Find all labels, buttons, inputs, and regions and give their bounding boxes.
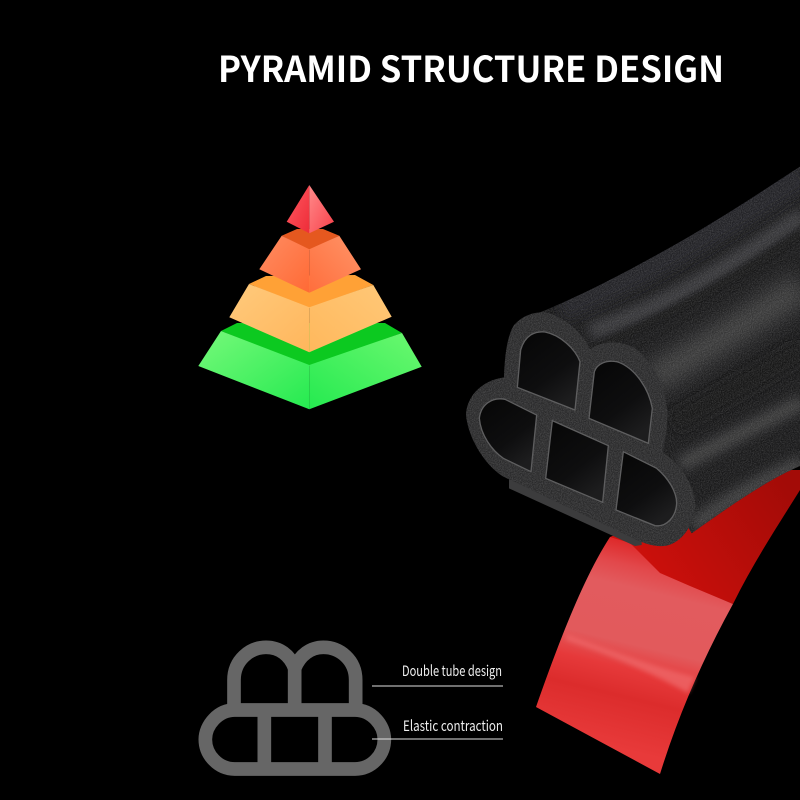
- tube: hole lower left: [479, 399, 537, 472]
- tube: face grain: [466, 312, 695, 546]
- rubber seal tube: [466, 150, 800, 567]
- diagram: double tube arches: [234, 647, 356, 710]
- label: double tube design: [372, 660, 503, 686]
- tape: shaded upper section: [610, 470, 800, 604]
- pyramid tier: red tip: [287, 185, 334, 233]
- cross-section diagram: [205, 647, 384, 769]
- tape: crease highlight: [566, 634, 695, 693]
- label: elastic contraction: Elastic contraction: [403, 715, 503, 736]
- tape: glossy peeled section: [536, 537, 733, 774]
- red adhesive tape: [536, 470, 800, 774]
- tube: mounting foot: [509, 478, 642, 546]
- tube: hole lower middle: [546, 421, 608, 502]
- label: double tube design: Double tube design: [402, 660, 502, 681]
- tube: hole lower right: [616, 452, 677, 526]
- label: elastic contraction: [372, 715, 503, 739]
- icon: four-tier pyramid: [198, 185, 422, 409]
- pyramid tier: green base: [198, 323, 422, 409]
- diagram: lower capsule with cells: [205, 710, 384, 769]
- pyramid tier: coral: [259, 229, 361, 293]
- title: PYRAMID STRUCTURE DESIGN: [218, 42, 724, 93]
- tube: extruded body: [540, 166, 800, 534]
- tube: hole upper left: [517, 332, 580, 410]
- tube: hole upper right: [589, 361, 652, 443]
- pyramid tier: orange: [229, 275, 392, 352]
- tube: front face: [466, 312, 695, 546]
- tube: front cross-section: [466, 312, 695, 546]
